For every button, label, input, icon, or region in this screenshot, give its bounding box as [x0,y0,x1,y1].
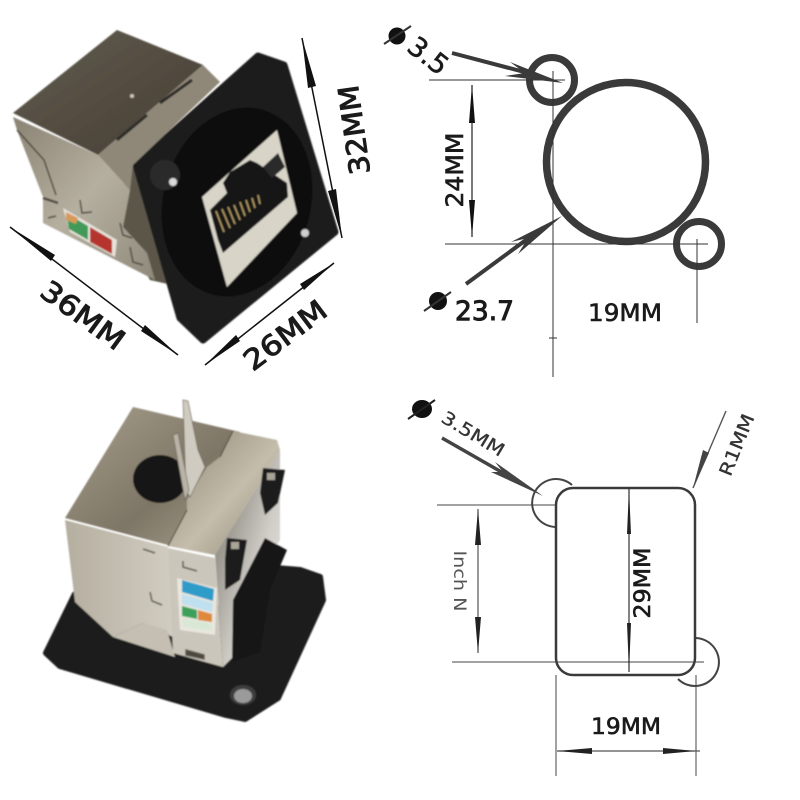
lower clip [225,538,247,590]
diameter symbol bottom [424,292,451,311]
label: 29MM: 29MM [631,548,656,618]
label: Inch N: Inch N [449,550,469,612]
dimension: 26MM: 26MM [237,293,334,377]
reference lines [437,505,704,776]
diameter symbol top [384,26,411,44]
shadow area between box and plate [120,165,172,285]
small stamped marks [143,549,204,659]
left face [65,520,175,638]
front narrow face [168,548,223,667]
bottom-right mounting hole arc [678,638,719,686]
top-left mounting hole [530,58,574,102]
right side of shell [215,450,280,667]
photo: connector front view [13,30,335,340]
cable slots and dot [117,80,192,140]
leader arrow: R1MM [693,411,726,488]
black locking tab [232,538,287,662]
jack latch notch [263,153,285,178]
top-left mounting hole arc [532,479,572,527]
large circle [546,82,706,242]
label: 24MM: 24MM [441,132,469,208]
diameter symbol [408,400,435,419]
screw hole bottom [301,229,309,237]
dimension: 26MM [205,263,334,377]
screw hole top [150,160,180,190]
leader arrow: 3.5 hole [452,53,563,83]
RJ45 jack opening [210,160,288,253]
black mounting plate [136,56,335,340]
leader arrow: 23.7 circle [466,216,562,284]
bottom-right mounting hole [676,222,722,266]
arrow: 29MM [627,488,631,672]
label: 3.5MM: 3.5MM [437,407,508,461]
dimension: 36MM: 36MM [34,274,131,357]
metal blade [173,400,205,500]
lower left tab [113,623,175,657]
arrow: Inch N [475,509,481,653]
label: 19MM: 19MM [588,299,662,327]
box rear face [98,65,220,190]
arrow: 24MM [469,85,475,237]
top face left [65,407,240,545]
colour label [177,578,217,635]
diagram: square cutout [408,400,759,776]
label: R1MM: R1MM [716,411,759,479]
box left face [13,117,155,280]
label: 23.7: 23.7 [455,296,514,327]
plate mounting hole [230,685,256,705]
box top face [13,30,203,155]
label: 3.5: 3.5 [401,31,454,82]
centre lines [429,71,708,377]
arrow: 19MM [557,748,700,754]
dimension: 36MM [10,227,178,357]
silver jack face [202,130,297,287]
dimension: 32MM [302,38,377,238]
rounded rectangle outline [556,488,695,675]
round flange [141,90,333,314]
diagram: round cutout [384,26,722,377]
photo: connector rear view [46,400,323,719]
top clip [260,468,285,515]
label: 19MM: 19MM [591,715,661,740]
leader arrow: 3.5MM [442,438,543,496]
dimension: 32MM: 32MM [332,83,377,177]
stamped marks on left face [17,130,143,265]
black mounting plate [46,568,323,719]
seam lines [168,431,233,546]
gold contact pins [216,195,260,232]
colour wiring label [63,208,117,257]
round cable hole [133,455,187,503]
top face right [168,431,280,555]
